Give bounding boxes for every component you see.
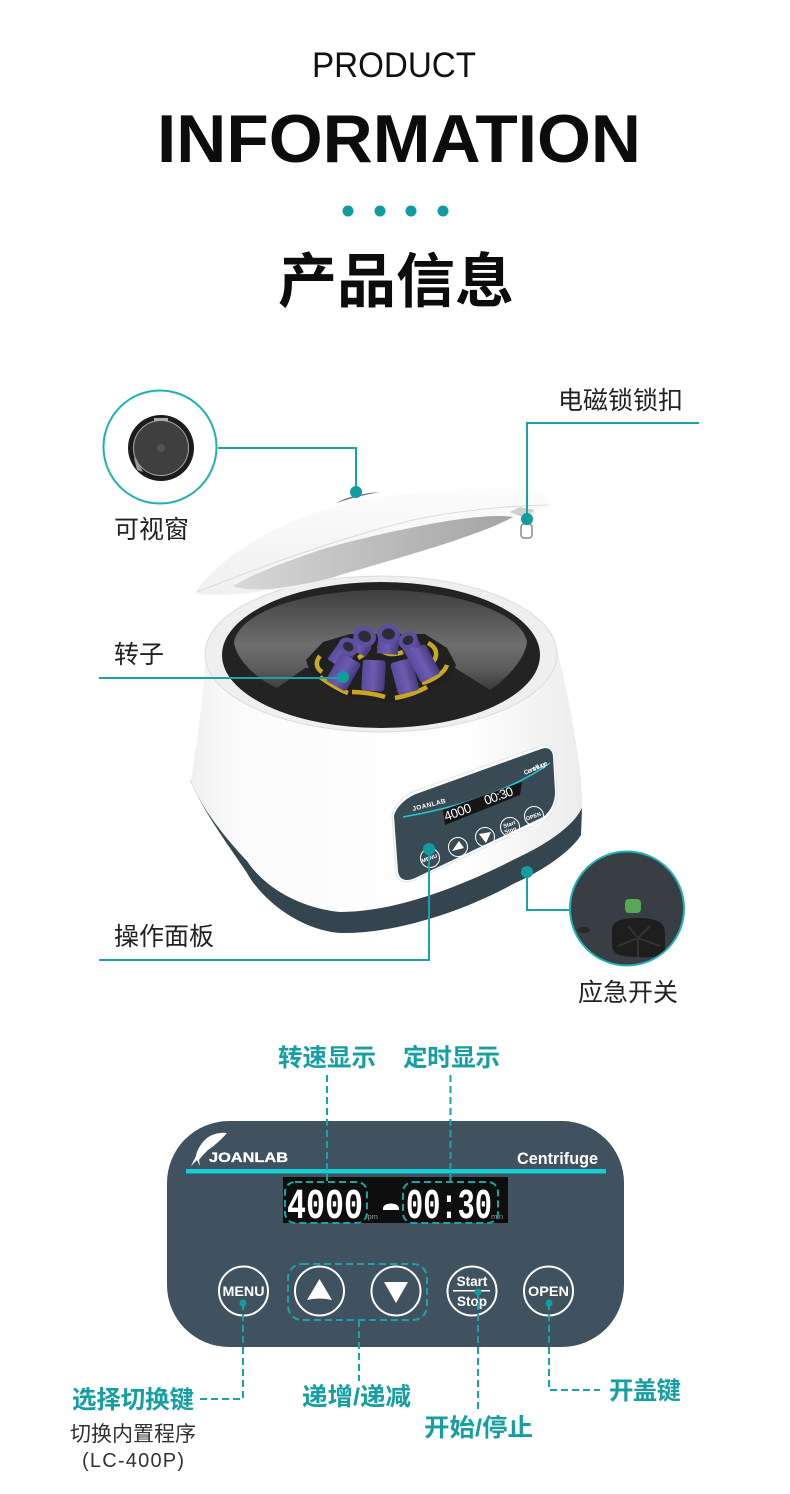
rotor hub [306,634,456,703]
dashed leader [326,1075,328,1182]
description line 2: (LC-400P) [82,1450,184,1472]
lid underside [233,516,513,589]
leader line [99,677,343,679]
annotation: start/stop [424,1288,533,1442]
anchor dot [350,486,362,498]
anchor dot [521,866,533,878]
small LCD digits: 4000 [442,800,473,824]
white body [191,650,582,912]
heading: INFORMATION: INFORMATION [157,101,641,177]
rim [205,576,557,732]
dashed box: speed [285,1182,367,1223]
teal curve [403,763,550,817]
back tube left [347,622,379,658]
leader line [218,448,356,492]
front tube D [406,644,441,683]
anchor dot [521,513,533,525]
label: 开始/停止 [424,1414,533,1442]
label: 可视窗 [114,516,189,544]
black bowl ring [222,582,540,728]
description line 1: 切换内置程序 [70,1423,196,1446]
small LCD timer: 00:30 [482,783,515,808]
label: 定时显示 [403,1044,500,1072]
panel face [394,748,555,880]
grey inner bowl [234,590,527,690]
small button labels [421,812,542,865]
small button labels: OPEN [525,812,542,823]
start stop button [448,1266,496,1316]
dark base [190,780,582,933]
Centrifuge small label: Centrifuge [523,760,549,777]
front tube B [361,659,386,692]
panel background [167,1121,624,1347]
brand logo: fish mark [191,1133,227,1166]
dashed box: up/down [288,1264,427,1320]
window inset circle [104,390,216,504]
lid [195,488,549,595]
small arrows [452,832,491,851]
annotation: increase/decrease [302,1320,411,1411]
inset circle with switch [570,852,684,966]
annotation: open key [546,1300,681,1405]
brand name: JOANLAB [209,1149,288,1165]
speed digits: 4000 [287,1182,363,1231]
label: 转子 [114,641,164,669]
lid outer shell [195,488,549,595]
back tube far left [327,634,362,671]
callout: viewing window [104,390,362,544]
small button labels: MENU [421,853,438,865]
product illustration: centrifuge [190,488,582,933]
heading: PRODUCT: PRODUCT [312,46,476,85]
start stop button: Start [457,1274,488,1289]
four teal decorative dots [342,206,448,216]
anchor dot [474,1288,482,1296]
min unit: min [491,1212,503,1221]
label: 电磁锁锁扣 [558,387,683,415]
product name: Centrifuge [517,1149,598,1168]
leader line [527,423,699,519]
back tube right [395,628,427,663]
MENU button: MENU [222,1283,264,1299]
callout: electromagnetic lock [521,387,699,525]
label: 操作面板 [114,923,214,951]
callout: operation panel [99,843,435,960]
lid rim edge [197,505,548,592]
start stop button: Stop [457,1294,487,1309]
dashed box: time [403,1182,498,1223]
rotor tubes and holders [317,622,447,698]
yellow holders [317,643,447,698]
cyan divider [186,1169,606,1174]
down button [372,1266,420,1316]
time digits: 00:30 [406,1182,492,1231]
small LCD [443,782,522,825]
control panel diagram [167,1121,624,1347]
annotation: speed display [278,1044,376,1182]
anchor dot [240,1300,246,1306]
LCD display [283,1177,508,1231]
callout: emergency switch [521,852,684,1007]
label: 应急开关 [578,979,678,1007]
dashed leader [200,1303,243,1399]
small button labels: Stop [504,826,518,836]
callout: rotor [99,641,349,683]
dashed leader [549,1303,600,1390]
small logo: JOANLAB [412,798,447,813]
heading: Chinese title: 产品信息 [278,249,514,315]
small buttons [420,806,544,868]
label: 选择切换键 [72,1386,194,1414]
OPEN button: OPEN [528,1283,569,1299]
front tube A [325,653,361,692]
leader line [99,849,429,960]
viewing window slit [337,492,380,503]
anchor dot [546,1300,552,1306]
label: 开盖键 [609,1377,681,1405]
small control panel on body [392,745,557,882]
leader line [527,872,571,910]
anchor dot [337,671,349,683]
annotation: menu key [70,1300,246,1472]
dashed leader [450,1075,452,1182]
back tube centre [375,623,401,655]
front tube C [390,658,420,695]
dashed leader [477,1292,479,1412]
small button labels: Start [503,820,517,830]
OPEN button [524,1266,573,1316]
label: 递增/递减 [302,1383,411,1411]
label: 转速显示 [278,1044,376,1072]
MENU button [219,1266,268,1316]
anchor dot [423,843,435,855]
up button [295,1266,344,1316]
dashed leader [358,1320,360,1381]
panel white bezel [392,745,557,882]
rotor icon [383,1204,399,1210]
lock latch [521,524,532,538]
annotation: timer display [403,1044,500,1182]
rpm unit: rpm [365,1212,378,1221]
